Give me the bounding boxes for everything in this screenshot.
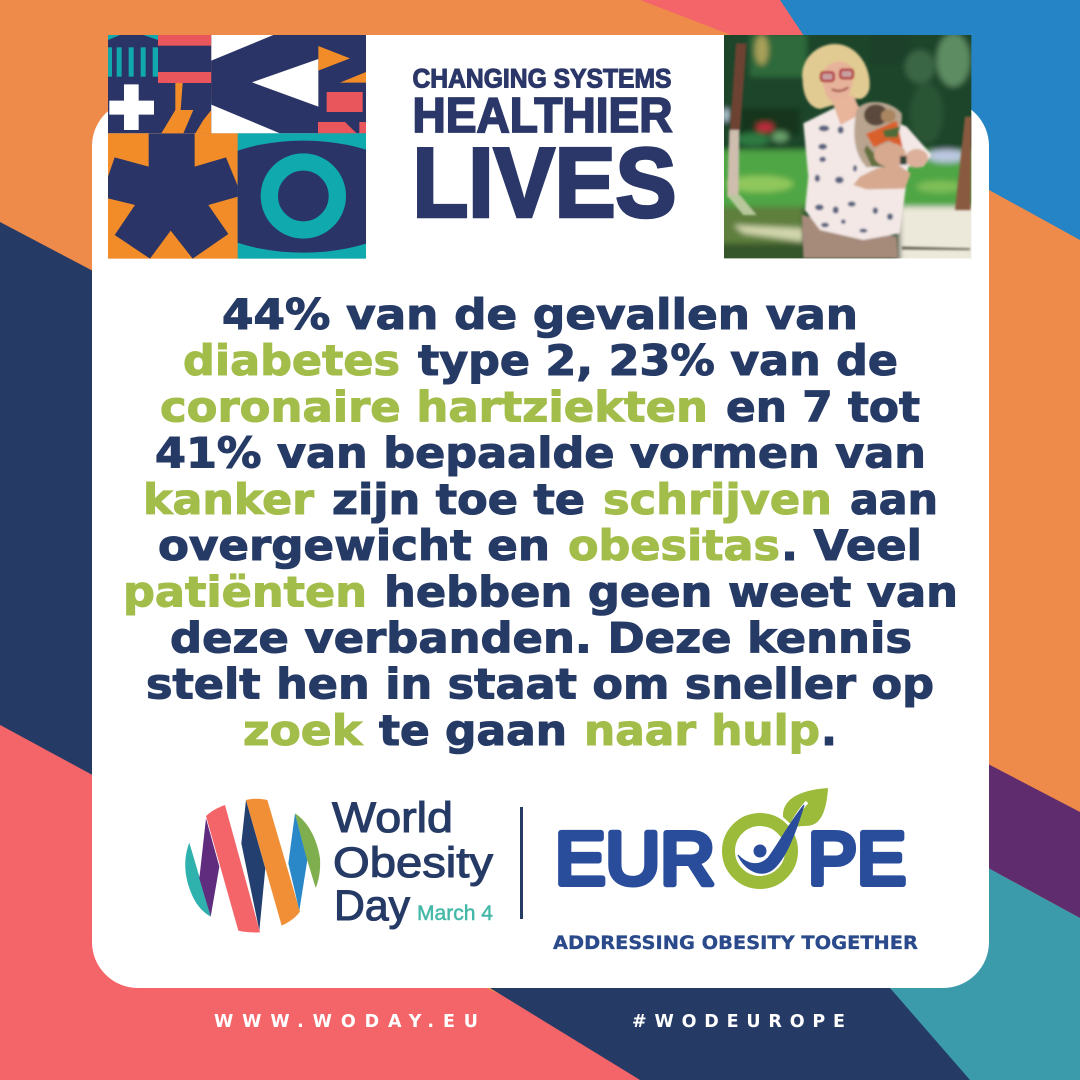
divider between logos <box>520 807 523 919</box>
text block: main statement: 41% van bepaalde vormen van <box>155 429 926 478</box>
text block: main statement: hebben geen weet van <box>384 567 958 616</box>
title: Changing Systems Healthier Lives: CHANGING SYSTEMS <box>412 64 672 94</box>
footer: website: WWW.WODAY.EU <box>214 1012 478 1032</box>
icon: World Obesity Day emblem <box>185 799 320 932</box>
text block: main statement: zoek <box>243 706 363 755</box>
text block: main statement: kanker <box>143 475 314 524</box>
text block: main statement: obesitas <box>568 521 780 570</box>
logo: Europe wordmark <box>555 788 906 900</box>
logo: Europe wordmark: EUR <box>555 817 715 900</box>
logo text: World Obesity Day March 4: Obesity <box>333 839 494 887</box>
logo text: World Obesity Day March 4: March 4 <box>417 902 493 925</box>
title: Changing Systems Healthier Lives <box>412 64 676 237</box>
text block: main statement: overgewicht en <box>158 521 550 570</box>
text block: main statement: . Veel <box>781 521 922 570</box>
logo text: World Obesity Day March 4: Day <box>334 882 410 930</box>
text block: main statement: type 2, 23% van de <box>418 336 898 385</box>
text block: main statement: . <box>821 706 837 755</box>
text block: main statement: aan <box>850 475 938 524</box>
text block: main statement: zijn toe te <box>332 475 585 524</box>
logo: Europe wordmark: PE <box>808 817 906 900</box>
text block: main statement: schrijven <box>603 475 832 524</box>
title: Changing Systems Healthier Lives: HEALTHIER <box>412 89 672 143</box>
header white strip <box>365 35 725 258</box>
text block: main statement: en 7 tot <box>726 382 920 432</box>
tagline: Addressing Obesity Together: ADDRESSING OBESITY TOGETHER <box>553 933 918 954</box>
logo text: World Obesity Day March 4: World <box>332 794 453 842</box>
photo: woman holding a small dog in a park <box>724 35 972 258</box>
icon: campaign logo tiles <box>108 35 366 259</box>
text block: main statement: coronaire hartziekten <box>160 382 708 432</box>
text block: main statement: stelt hen in staat om sneller op <box>146 660 934 709</box>
text block: main statement: patiënten <box>123 567 367 616</box>
text block: main statement: diabetes <box>183 336 400 385</box>
text block: main statement: naar hulp <box>584 706 820 755</box>
text block: main statement <box>123 290 958 755</box>
panel: white card <box>92 100 989 988</box>
footer: hashtag: #WODEUROPE <box>632 1012 845 1032</box>
text block: main statement: 44% van de gevallen van <box>222 290 858 339</box>
title: Changing Systems Healthier Lives: LIVES <box>412 128 676 238</box>
text block: main statement: deze verbanden. Deze kennis <box>170 614 912 662</box>
text block: main statement: te gaan <box>379 706 567 755</box>
logo text: World Obesity Day March 4 <box>332 794 494 930</box>
